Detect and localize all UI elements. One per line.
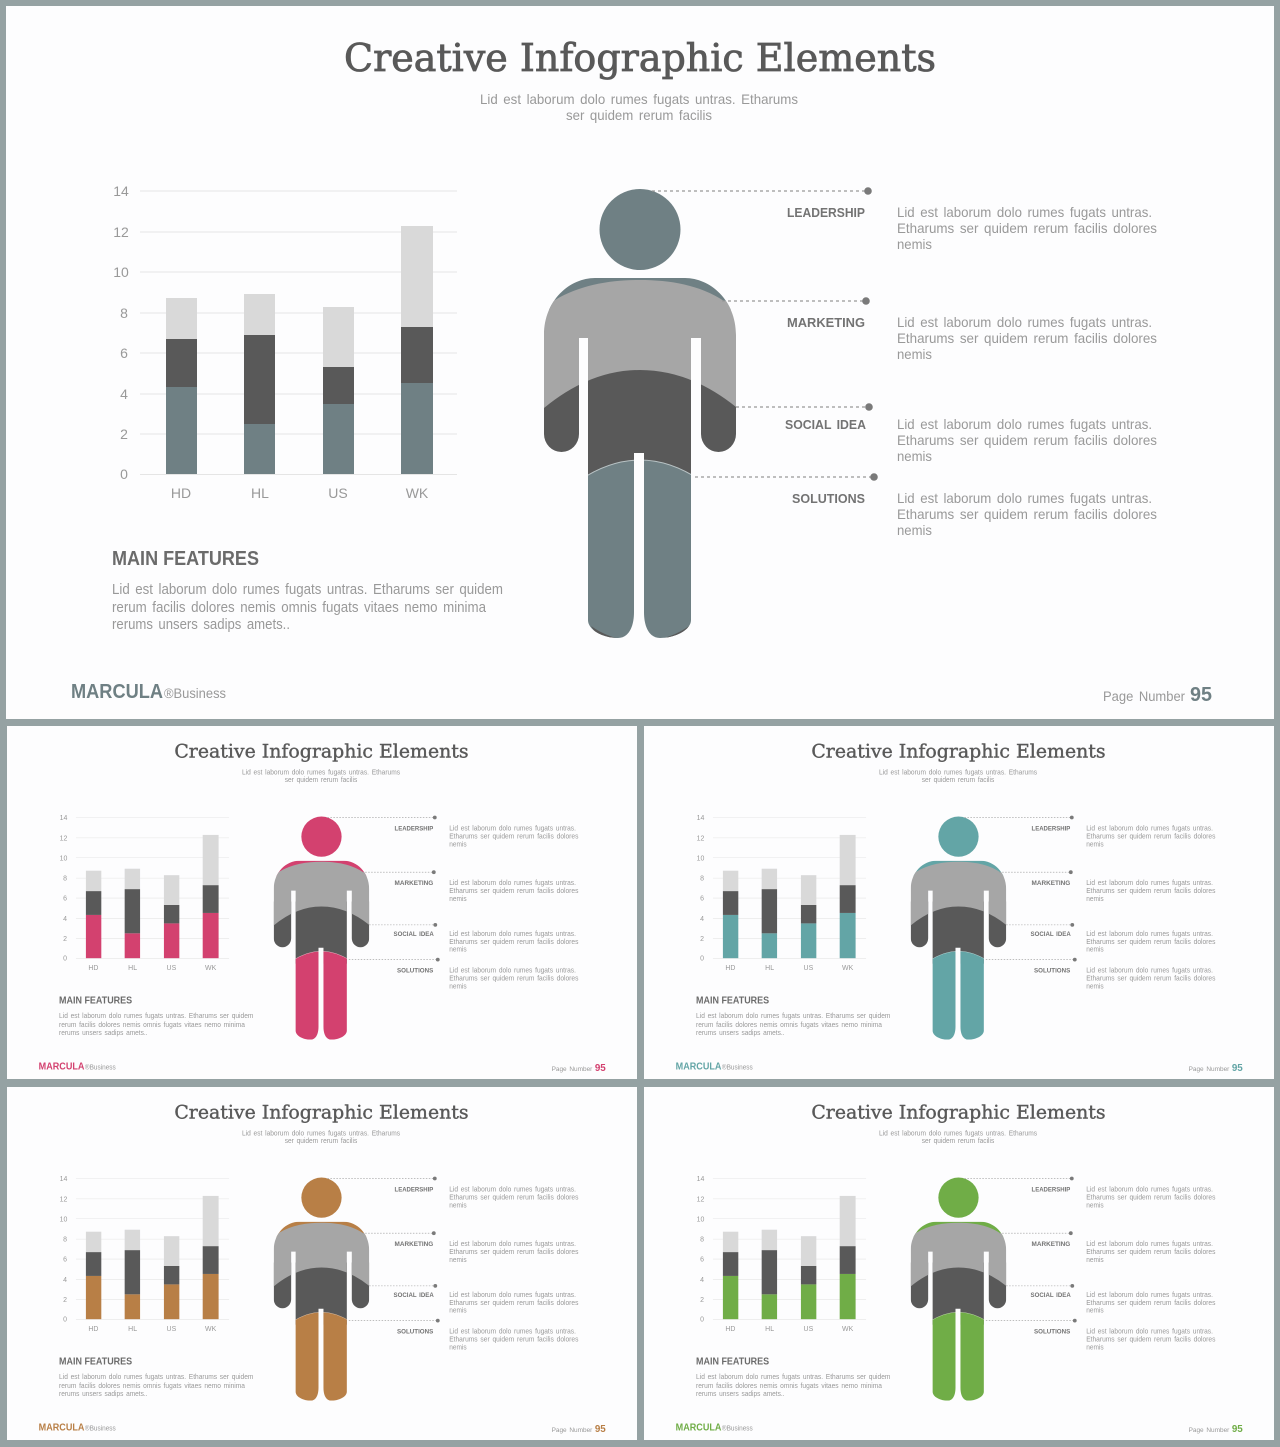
labels and descriptions: Etharums ser quidem rerum facilis dolores bbox=[1086, 976, 1216, 983]
footer brand: ®Business bbox=[722, 1425, 753, 1433]
stacked bar chart: HL bbox=[765, 965, 774, 972]
callout lines bbox=[964, 1177, 1077, 1323]
stacked bar chart: 0 bbox=[120, 466, 128, 482]
stacked bar chart: 0 bbox=[63, 956, 67, 963]
labels and descriptions: nemis bbox=[449, 841, 467, 848]
labels and descriptions: Etharums ser quidem rerum facilis dolores bbox=[1086, 1249, 1216, 1256]
labels and descriptions: Etharums ser quidem rerum facilis dolores bbox=[897, 330, 1157, 346]
callout lines bbox=[964, 816, 1077, 962]
labels and descriptions: Lid est laborum dolo rumes fugats untras. bbox=[449, 825, 576, 832]
stacked bar chart bbox=[60, 1176, 229, 1333]
main features text bbox=[59, 1356, 253, 1398]
stacked bar chart: WK bbox=[842, 1326, 854, 1333]
labels and descriptions: nemis bbox=[449, 1308, 467, 1315]
stacked bar chart bbox=[113, 183, 457, 501]
labels and descriptions: nemis bbox=[449, 983, 467, 990]
subtitle bbox=[242, 1130, 401, 1145]
labels and descriptions: Lid est laborum dolo rumes fugats untras. bbox=[897, 314, 1152, 330]
labels and descriptions: Lid est laborum dolo rumes fugats untras. bbox=[449, 968, 576, 975]
stacked bar chart: 10 bbox=[697, 1216, 705, 1223]
stacked bar chart: 10 bbox=[60, 1216, 68, 1223]
labels and descriptions: MARKETING bbox=[1032, 1241, 1070, 1248]
stacked bar chart: 2 bbox=[700, 936, 704, 943]
stacked bar chart: HD bbox=[171, 485, 191, 501]
stacked bar chart: 14 bbox=[60, 1176, 68, 1183]
footer brand: ®Business bbox=[85, 1425, 116, 1433]
labels and descriptions: SOCIAL IDEA bbox=[1031, 931, 1071, 938]
stacked bar chart: 2 bbox=[63, 1297, 67, 1304]
stacked bar chart: 6 bbox=[700, 896, 704, 903]
stacked bar chart: 10 bbox=[60, 855, 68, 862]
main features text: Lid est laborum dolo rumes fugats untras. Etharums ser quidem bbox=[112, 582, 503, 598]
stacked bar chart: 12 bbox=[697, 1196, 705, 1203]
labels and descriptions: SOCIAL IDEA bbox=[394, 1292, 434, 1299]
person figure bbox=[274, 816, 370, 1040]
labels and descriptions: Etharums ser quidem rerum facilis dolores bbox=[449, 1194, 579, 1201]
main features text: rerums unsers sadips amets.. bbox=[59, 1028, 148, 1037]
main features text: rerum facilis dolores nemis omnis fugats vitaes nemo minima bbox=[59, 1020, 245, 1029]
labels and descriptions: Lid est laborum dolo rumes fugats untras. bbox=[449, 880, 576, 887]
stacked bar chart: 0 bbox=[63, 1317, 67, 1324]
subtitle: ser quidem rerum facilis bbox=[285, 1138, 358, 1145]
labels and descriptions: nemis bbox=[1086, 1344, 1104, 1351]
title: Creative Infographic Elements bbox=[811, 1101, 1106, 1123]
stacked bar chart: 6 bbox=[120, 345, 128, 361]
page number: 95 bbox=[595, 1063, 606, 1074]
stacked bar chart: 4 bbox=[700, 1277, 704, 1284]
labels and descriptions: SOLUTIONS bbox=[1034, 1329, 1070, 1336]
stacked bar chart: HL bbox=[251, 485, 269, 501]
panel: brown slide bbox=[7, 1087, 637, 1440]
labels and descriptions: Lid est laborum dolo rumes fugats untras. bbox=[1086, 968, 1213, 975]
stacked bar chart: HL bbox=[128, 965, 137, 972]
page number bbox=[1189, 1063, 1243, 1074]
main features text bbox=[112, 548, 503, 633]
labels and descriptions: nemis bbox=[1086, 1308, 1104, 1315]
stacked bar chart: 10 bbox=[697, 855, 705, 862]
main features text: MAIN FEATURES bbox=[112, 548, 259, 570]
stacked bar chart: 10 bbox=[113, 264, 129, 280]
main features text: Lid est laborum dolo rumes fugats untras. Etharums ser quidem bbox=[59, 1372, 253, 1381]
footer brand: MARCULA bbox=[71, 681, 163, 703]
main features text: MAIN FEATURES bbox=[696, 995, 769, 1006]
page number: 95 bbox=[1190, 684, 1212, 706]
labels and descriptions bbox=[394, 1186, 579, 1351]
labels and descriptions: nemis bbox=[449, 1257, 467, 1264]
main features text: Lid est laborum dolo rumes fugats untras. Etharums ser quidem bbox=[696, 1011, 890, 1020]
labels and descriptions: SOLUTIONS bbox=[397, 968, 433, 975]
main features text bbox=[696, 995, 890, 1037]
labels and descriptions: Lid est laborum dolo rumes fugats untras. bbox=[897, 490, 1152, 506]
page number bbox=[1189, 1424, 1243, 1435]
main features text: rerums unsers sadips amets.. bbox=[112, 617, 290, 633]
subtitle: Lid est laborum dolo rumes fugats untras. Etharums bbox=[242, 1130, 401, 1137]
labels and descriptions: LEADERSHIP bbox=[395, 825, 433, 832]
labels and descriptions: MARKETING bbox=[1032, 880, 1070, 887]
labels and descriptions: Etharums ser quidem rerum facilis dolores bbox=[1086, 1337, 1216, 1344]
labels and descriptions: Etharums ser quidem rerum facilis dolores bbox=[1086, 833, 1216, 840]
main features text bbox=[696, 1356, 890, 1398]
stacked bar chart: 12 bbox=[697, 835, 705, 842]
labels and descriptions: nemis bbox=[897, 448, 932, 464]
stacked bar chart: 6 bbox=[700, 1257, 704, 1264]
stacked bar chart: 6 bbox=[63, 896, 67, 903]
stacked bar chart: 2 bbox=[700, 1297, 704, 1304]
labels and descriptions: SOLUTIONS bbox=[1034, 968, 1070, 975]
title: Creative Infographic Elements bbox=[811, 740, 1106, 762]
labels and descriptions: Etharums ser quidem rerum facilis dolores bbox=[449, 976, 579, 983]
stacked bar chart: US bbox=[328, 485, 348, 501]
stacked bar chart: US bbox=[167, 1326, 177, 1333]
main features text: rerums unsers sadips amets.. bbox=[696, 1028, 785, 1037]
labels and descriptions: nemis bbox=[897, 522, 932, 538]
labels and descriptions: Lid est laborum dolo rumes fugats untras. bbox=[1086, 825, 1213, 832]
title: Creative Infographic Elements bbox=[344, 36, 936, 80]
main features text bbox=[59, 995, 253, 1037]
subtitle bbox=[879, 769, 1038, 784]
labels and descriptions: Etharums ser quidem rerum facilis dolores bbox=[449, 1300, 579, 1307]
main features text: rerum facilis dolores nemis omnis fugats vitaes nemo minima bbox=[696, 1381, 882, 1390]
subtitle: ser quidem rerum facilis bbox=[285, 777, 358, 784]
main features text: rerum facilis dolores nemis omnis fugats vitaes nemo minima bbox=[696, 1020, 882, 1029]
labels and descriptions: nemis bbox=[449, 1344, 467, 1351]
stacked bar chart: 8 bbox=[700, 876, 704, 883]
subtitle bbox=[879, 1130, 1038, 1145]
panel: pink slide bbox=[7, 726, 637, 1079]
labels and descriptions bbox=[1031, 1186, 1216, 1351]
stacked bar chart: US bbox=[804, 1326, 814, 1333]
labels and descriptions: SOLUTIONS bbox=[792, 492, 865, 506]
stacked bar chart: HD bbox=[88, 965, 98, 972]
labels and descriptions: Etharums ser quidem rerum facilis dolores bbox=[449, 1249, 579, 1256]
subtitle: Lid est laborum dolo rumes fugats untras. Etharums bbox=[879, 769, 1038, 776]
stacked bar chart: 12 bbox=[113, 224, 129, 240]
labels and descriptions: Etharums ser quidem rerum facilis dolores bbox=[1086, 1194, 1216, 1201]
labels and descriptions: Etharums ser quidem rerum facilis dolores bbox=[1086, 888, 1216, 895]
footer brand: MARCULA bbox=[676, 1062, 721, 1073]
panel: teal slide bbox=[644, 726, 1274, 1079]
stacked bar chart: 4 bbox=[120, 386, 128, 402]
footer brand bbox=[39, 1062, 116, 1073]
slide content bbox=[71, 36, 1212, 706]
subtitle bbox=[480, 91, 798, 123]
footer brand: MARCULA bbox=[676, 1423, 721, 1434]
stacked bar chart: HL bbox=[765, 1326, 774, 1333]
labels and descriptions bbox=[1031, 825, 1216, 990]
stacked bar chart: 8 bbox=[63, 1237, 67, 1244]
stacked bar chart: 14 bbox=[113, 183, 129, 199]
labels and descriptions: LEADERSHIP bbox=[1032, 825, 1070, 832]
labels and descriptions: LEADERSHIP bbox=[787, 206, 865, 220]
labels and descriptions: MARKETING bbox=[395, 880, 433, 887]
stacked bar chart: WK bbox=[406, 485, 429, 501]
page number: 95 bbox=[1232, 1063, 1243, 1074]
stacked bar chart: 8 bbox=[120, 305, 128, 321]
labels and descriptions: Lid est laborum dolo rumes fugats untras. bbox=[1086, 1241, 1213, 1248]
footer brand: ®Business bbox=[85, 1064, 116, 1072]
labels and descriptions: SOCIAL IDEA bbox=[785, 418, 866, 432]
stacked bar chart: 4 bbox=[63, 1277, 67, 1284]
person figure bbox=[274, 1178, 370, 1401]
stacked bar chart: HL bbox=[128, 1326, 137, 1333]
labels and descriptions: Etharums ser quidem rerum facilis dolores bbox=[897, 220, 1157, 236]
title: Creative Infographic Elements bbox=[174, 740, 469, 762]
labels and descriptions: Lid est laborum dolo rumes fugats untras. bbox=[1086, 931, 1213, 938]
page number: Page Number bbox=[552, 1066, 593, 1073]
footer brand: ®Business bbox=[164, 685, 226, 701]
labels and descriptions: nemis bbox=[1086, 1257, 1104, 1264]
subtitle: Lid est laborum dolo rumes fugats untras. Etharums bbox=[879, 1130, 1038, 1137]
labels and descriptions: SOCIAL IDEA bbox=[394, 931, 434, 938]
main features text: rerums unsers sadips amets.. bbox=[696, 1389, 785, 1398]
labels and descriptions: Lid est laborum dolo rumes fugats untras. bbox=[1086, 1292, 1213, 1299]
footer brand bbox=[71, 681, 226, 703]
footer brand: MARCULA bbox=[39, 1423, 84, 1434]
labels and descriptions: nemis bbox=[449, 947, 467, 954]
footer brand bbox=[39, 1423, 116, 1434]
labels and descriptions: Lid est laborum dolo rumes fugats untras. bbox=[449, 931, 576, 938]
labels and descriptions: SOLUTIONS bbox=[397, 1329, 433, 1336]
stacked bar chart: 14 bbox=[697, 1176, 705, 1183]
main features text: Lid est laborum dolo rumes fugats untras. Etharums ser quidem bbox=[696, 1372, 890, 1381]
labels and descriptions: Etharums ser quidem rerum facilis dolores bbox=[449, 833, 579, 840]
callout lines bbox=[327, 816, 440, 962]
subtitle: Lid est laborum dolo rumes fugats untras. Etharums bbox=[480, 91, 798, 107]
labels and descriptions: Lid est laborum dolo rumes fugats untras. bbox=[897, 416, 1152, 432]
stacked bar chart: HD bbox=[88, 1326, 98, 1333]
labels and descriptions: nemis bbox=[1086, 947, 1104, 954]
subtitle bbox=[242, 769, 401, 784]
callout lines bbox=[652, 187, 878, 481]
labels and descriptions: nemis bbox=[897, 236, 932, 252]
callout lines bbox=[327, 1177, 440, 1323]
labels and descriptions: Lid est laborum dolo rumes fugats untras. bbox=[449, 1241, 576, 1248]
page number: 95 bbox=[1232, 1424, 1243, 1435]
stacked bar chart: 14 bbox=[60, 815, 68, 822]
footer brand: MARCULA bbox=[39, 1062, 84, 1073]
labels and descriptions: Lid est laborum dolo rumes fugats untras. bbox=[897, 204, 1152, 220]
stacked bar chart: US bbox=[804, 965, 814, 972]
stacked bar chart: WK bbox=[205, 1326, 217, 1333]
stacked bar chart bbox=[697, 815, 866, 972]
stacked bar chart: 6 bbox=[63, 1257, 67, 1264]
stacked bar chart: 2 bbox=[120, 426, 128, 442]
labels and descriptions: Etharums ser quidem rerum facilis dolores bbox=[449, 888, 579, 895]
title: Creative Infographic Elements bbox=[174, 1101, 469, 1123]
page number: Page Number bbox=[1189, 1427, 1230, 1434]
labels and descriptions: Etharums ser quidem rerum facilis dolores bbox=[1086, 1300, 1216, 1307]
stacked bar chart: 4 bbox=[700, 916, 704, 923]
main features text: rerum facilis dolores nemis omnis fugats vitaes nemo minima bbox=[59, 1381, 245, 1390]
labels and descriptions bbox=[394, 825, 579, 990]
footer brand: ®Business bbox=[722, 1064, 753, 1072]
main features text: Lid est laborum dolo rumes fugats untras. Etharums ser quidem bbox=[59, 1011, 253, 1020]
page number bbox=[1103, 684, 1212, 706]
stacked bar chart bbox=[697, 1176, 866, 1333]
labels and descriptions bbox=[785, 204, 1157, 538]
page number bbox=[552, 1063, 606, 1074]
labels and descriptions: Etharums ser quidem rerum facilis dolores bbox=[449, 939, 579, 946]
labels and descriptions: nemis bbox=[449, 1202, 467, 1209]
stacked bar chart: 0 bbox=[700, 1317, 704, 1324]
footer brand bbox=[676, 1062, 753, 1073]
stacked bar chart: 14 bbox=[697, 815, 705, 822]
person figure bbox=[544, 189, 736, 638]
page number: Page Number bbox=[552, 1427, 593, 1434]
slide content bbox=[39, 740, 606, 1074]
person figure bbox=[910, 1178, 1006, 1401]
subtitle: ser quidem rerum facilis bbox=[922, 777, 995, 784]
page number bbox=[552, 1424, 606, 1435]
stacked bar chart: US bbox=[167, 965, 177, 972]
main features text: MAIN FEATURES bbox=[59, 995, 132, 1006]
stacked bar chart: 4 bbox=[63, 916, 67, 923]
labels and descriptions: Lid est laborum dolo rumes fugats untras. bbox=[449, 1292, 576, 1299]
stacked bar chart: 0 bbox=[700, 956, 704, 963]
stacked bar chart: WK bbox=[842, 965, 854, 972]
labels and descriptions: nemis bbox=[897, 346, 932, 362]
stacked bar chart bbox=[60, 815, 229, 972]
stacked bar chart: 12 bbox=[60, 835, 68, 842]
main features text: rerums unsers sadips amets.. bbox=[59, 1389, 148, 1398]
labels and descriptions: Etharums ser quidem rerum facilis dolores bbox=[1086, 939, 1216, 946]
subtitle: ser quidem rerum facilis bbox=[922, 1138, 995, 1145]
labels and descriptions: Etharums ser quidem rerum facilis dolores bbox=[897, 432, 1157, 448]
stacked bar chart: 8 bbox=[700, 1237, 704, 1244]
stacked bar chart: HD bbox=[725, 1326, 735, 1333]
page number: Page Number bbox=[1103, 689, 1185, 704]
slide content bbox=[676, 740, 1243, 1074]
page number: 95 bbox=[595, 1424, 606, 1435]
labels and descriptions: nemis bbox=[1086, 983, 1104, 990]
labels and descriptions: Lid est laborum dolo rumes fugats untras. bbox=[1086, 1329, 1213, 1336]
labels and descriptions: Lid est laborum dolo rumes fugats untras. bbox=[1086, 880, 1213, 887]
stacked bar chart: HD bbox=[725, 965, 735, 972]
labels and descriptions: nemis bbox=[1086, 896, 1104, 903]
slide content bbox=[676, 1101, 1243, 1435]
labels and descriptions: Lid est laborum dolo rumes fugats untras. bbox=[1086, 1186, 1213, 1193]
stacked bar chart: 12 bbox=[60, 1196, 68, 1203]
main features text: MAIN FEATURES bbox=[59, 1356, 132, 1367]
subtitle: ser quidem rerum facilis bbox=[566, 107, 712, 123]
main features text: MAIN FEATURES bbox=[696, 1356, 769, 1367]
labels and descriptions: nemis bbox=[1086, 1202, 1104, 1209]
labels and descriptions: Lid est laborum dolo rumes fugats untras. bbox=[449, 1186, 576, 1193]
subtitle: Lid est laborum dolo rumes fugats untras. Etharums bbox=[242, 769, 401, 776]
labels and descriptions: MARKETING bbox=[787, 316, 865, 330]
labels and descriptions: Etharums ser quidem rerum facilis dolores bbox=[897, 506, 1157, 522]
labels and descriptions: LEADERSHIP bbox=[395, 1186, 433, 1193]
slide content bbox=[39, 1101, 606, 1435]
stacked bar chart: WK bbox=[205, 965, 217, 972]
footer brand bbox=[676, 1423, 753, 1434]
stacked bar chart: 2 bbox=[63, 936, 67, 943]
labels and descriptions: MARKETING bbox=[395, 1241, 433, 1248]
main features text: rerum facilis dolores nemis omnis fugats vitaes nemo minima bbox=[112, 600, 487, 616]
labels and descriptions: SOCIAL IDEA bbox=[1031, 1292, 1071, 1299]
labels and descriptions: Lid est laborum dolo rumes fugats untras. bbox=[449, 1329, 576, 1336]
page number: Page Number bbox=[1189, 1066, 1230, 1073]
labels and descriptions: nemis bbox=[1086, 841, 1104, 848]
labels and descriptions: Etharums ser quidem rerum facilis dolores bbox=[449, 1337, 579, 1344]
labels and descriptions: nemis bbox=[449, 896, 467, 903]
person figure bbox=[910, 816, 1006, 1040]
stacked bar chart: 8 bbox=[63, 876, 67, 883]
panel: green slide bbox=[644, 1087, 1274, 1440]
labels and descriptions: LEADERSHIP bbox=[1032, 1186, 1070, 1193]
panel: large grey slide bbox=[6, 6, 1274, 719]
